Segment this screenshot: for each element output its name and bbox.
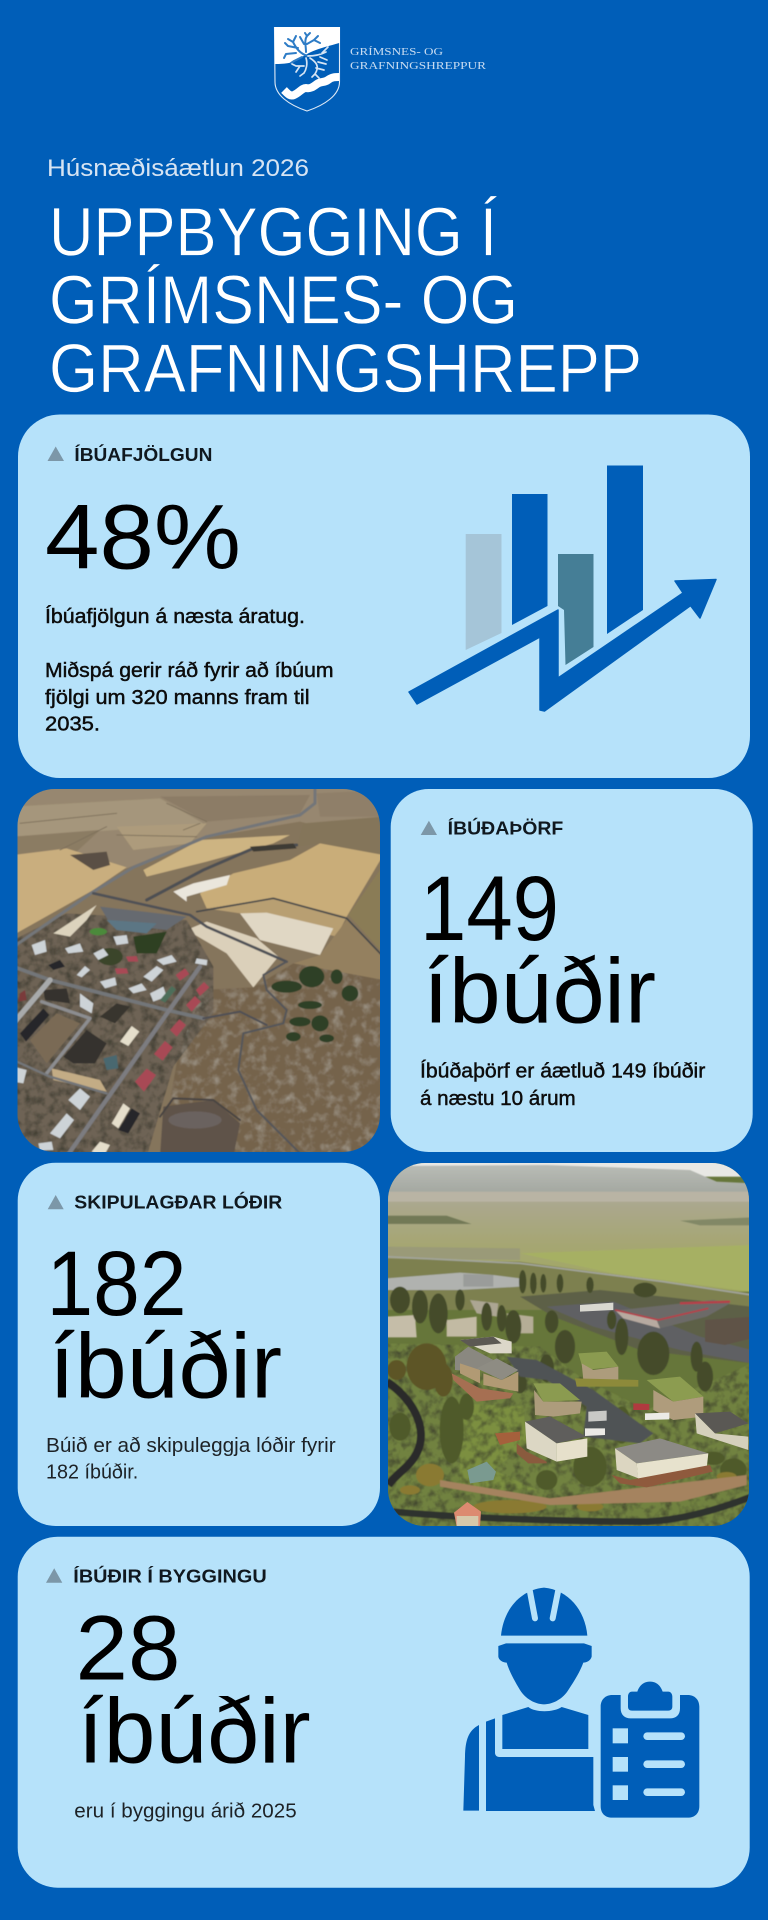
title [49, 194, 642, 407]
subtitle: Húsnæðisáætlun 2026 [47, 155, 309, 182]
text block: Miðspá gerir ráð fyrir að íbúum [45, 660, 334, 682]
text block [420, 1059, 706, 1110]
icon: shield crest [274, 27, 340, 111]
panel: skipulagðar lóðir [18, 1163, 380, 1526]
big number: 182 [46, 1233, 186, 1335]
text block: 2035. [45, 714, 100, 736]
text block [45, 605, 334, 736]
panel heading: ÍBÚÐAÞÖRF [448, 817, 563, 838]
logo: municipality shield and name [274, 27, 487, 111]
text block [46, 1435, 336, 1483]
panel heading: SKIPULAGÐAR LÓÐIR [74, 1192, 282, 1213]
big number [46, 1233, 282, 1417]
text block: Íbúðaþörf er áætluð 149 íbúðir [420, 1059, 706, 1082]
logo wordmark [350, 46, 487, 72]
big number [76, 1597, 311, 1782]
text block: Búið er að skipuleggja lóðir fyrir [46, 1435, 336, 1457]
big number: 48% [45, 486, 241, 588]
icon: construction worker with clipboard [463, 1588, 699, 1818]
panel: íbúðir í byggingu [18, 1537, 750, 1888]
big number [420, 858, 656, 1042]
text block: 182 íbúðir. [46, 1461, 138, 1483]
photo: rendering of new housing area [387, 1160, 752, 1528]
big number: 149 [420, 858, 559, 960]
photo: aerial view of the village [13, 787, 383, 1157]
big number: íbúðir [78, 1680, 311, 1782]
bar chart with rising arrow [409, 466, 716, 711]
title: GRAFNINGSHREPP [49, 330, 642, 407]
title: GRÍMSNES- OG [49, 262, 518, 338]
panel heading: ÍBÚAFJÖLGUN [74, 444, 212, 465]
big number: íbúðir [423, 940, 656, 1042]
text block: fjölgi um 320 manns fram til [45, 687, 310, 709]
panel: íbúðaþörf [391, 789, 753, 1152]
big number: íbúðir [49, 1315, 282, 1417]
text block: Íbúafjölgun á næsta áratug. [45, 605, 305, 628]
text block: á næstu 10 árum [420, 1088, 576, 1110]
logo wordmark: GRÍMSNES- OG [350, 46, 443, 58]
big number: 28 [76, 1597, 180, 1699]
logo wordmark: GRAFNINGSHREPPUR [350, 60, 487, 72]
panel: íbúafjölgun [18, 414, 750, 778]
text block: eru í byggingu árið 2025 [74, 1801, 297, 1823]
title: UPPBYGGING Í [49, 194, 498, 270]
panel heading: ÍBÚÐIR Í BYGGINGU [73, 1566, 267, 1587]
